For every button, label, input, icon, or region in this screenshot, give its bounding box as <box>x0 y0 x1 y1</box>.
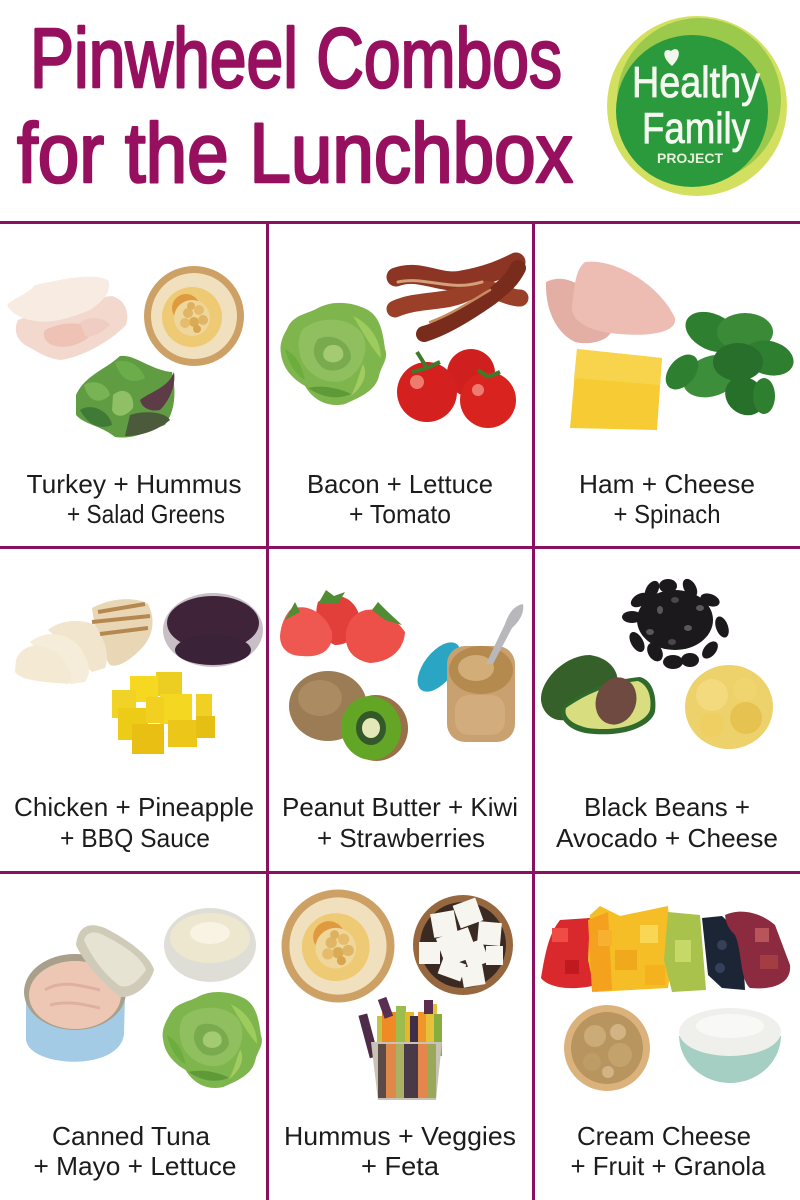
caption: Cream Cheese <box>577 1121 751 1151</box>
icon: sliced chicken <box>15 599 153 684</box>
icon: granola bowl <box>564 1005 650 1091</box>
panel: bacon lettuce tomato <box>280 262 520 428</box>
icon: black beans <box>622 576 731 669</box>
caption: Canned Tuna <box>52 1121 211 1151</box>
icon: bbq sauce bowl <box>163 593 263 667</box>
caption <box>34 1121 236 1181</box>
icon: mayo bowl <box>164 908 256 982</box>
panel: peanut butter kiwi strawberries <box>280 590 523 766</box>
icon: yogurt bowl <box>679 1008 781 1083</box>
caption <box>26 469 241 529</box>
logo: Healthy Family Project: Family <box>642 104 750 153</box>
caption: Turkey + Hummus <box>26 469 241 499</box>
icon: bacon <box>395 262 520 334</box>
caption: + Tomato <box>349 499 451 529</box>
icon: strawberries <box>280 590 405 663</box>
icon: kiwi <box>289 671 413 766</box>
caption: Bacon + Lettuce <box>307 469 493 499</box>
caption: + Spinach <box>614 499 720 529</box>
icon: shredded cheese <box>685 665 773 749</box>
icon: hummus bowl <box>144 266 244 366</box>
caption: + Mayo + Lettuce <box>34 1151 236 1181</box>
logo: Healthy Family Project: PROJECT <box>657 150 723 166</box>
caption: + Salad Greens <box>67 499 225 529</box>
caption <box>284 1121 516 1181</box>
title: for the Lunchbox <box>17 106 573 200</box>
caption <box>579 469 755 529</box>
caption <box>282 792 518 853</box>
icon: tuna can <box>24 925 154 1062</box>
panel: black beans avocado cheese <box>541 576 773 749</box>
caption: Ham + Cheese <box>579 469 755 499</box>
icon: cheese slice <box>570 349 662 430</box>
icon: pineapple cubes <box>112 672 215 754</box>
icon: spinach <box>659 304 798 423</box>
panel: turkey hummus salad greens <box>7 266 244 438</box>
caption <box>14 792 254 853</box>
caption <box>307 469 493 529</box>
icon: hummus bowl <box>282 890 394 1002</box>
logo: Healthy Family Project: Healthy <box>632 58 760 107</box>
caption: Avocado + Cheese <box>556 823 778 853</box>
icon: feta bowl <box>413 895 513 995</box>
caption: + Strawberries <box>317 823 485 853</box>
caption: Chicken + Pineapple <box>14 792 254 822</box>
caption <box>556 792 778 853</box>
caption: Black Beans + <box>584 792 750 822</box>
title: Pinwheel Combos <box>30 11 562 105</box>
title <box>17 11 573 200</box>
caption: + Feta <box>361 1151 440 1181</box>
panel: tuna mayo lettuce <box>24 908 262 1088</box>
icon: fruit rainbow <box>541 906 790 992</box>
logo: Healthy Family Project <box>607 16 787 196</box>
icon: salad greens <box>76 356 174 438</box>
icon: lettuce <box>280 303 386 405</box>
icon: sliced turkey <box>7 277 127 360</box>
icon: veggie sticks in cup <box>358 997 442 1100</box>
icon: avocado <box>541 655 655 734</box>
caption: Hummus + Veggies <box>284 1121 516 1151</box>
caption: Peanut Butter + Kiwi <box>282 792 518 822</box>
icon: ham <box>546 262 675 343</box>
panel: hummus veggies feta <box>282 890 513 1100</box>
icon: peanut butter jar <box>409 604 523 742</box>
caption <box>570 1121 766 1181</box>
caption: + Fruit + Granola <box>570 1151 766 1181</box>
panel: chicken pineapple bbq sauce <box>15 593 263 754</box>
panel: cream cheese fruit granola <box>541 906 790 1091</box>
caption: + BBQ Sauce <box>60 823 210 853</box>
icon: tomatoes <box>397 349 516 428</box>
icon: lettuce <box>163 992 262 1088</box>
panel: ham cheese spinach <box>546 262 798 430</box>
